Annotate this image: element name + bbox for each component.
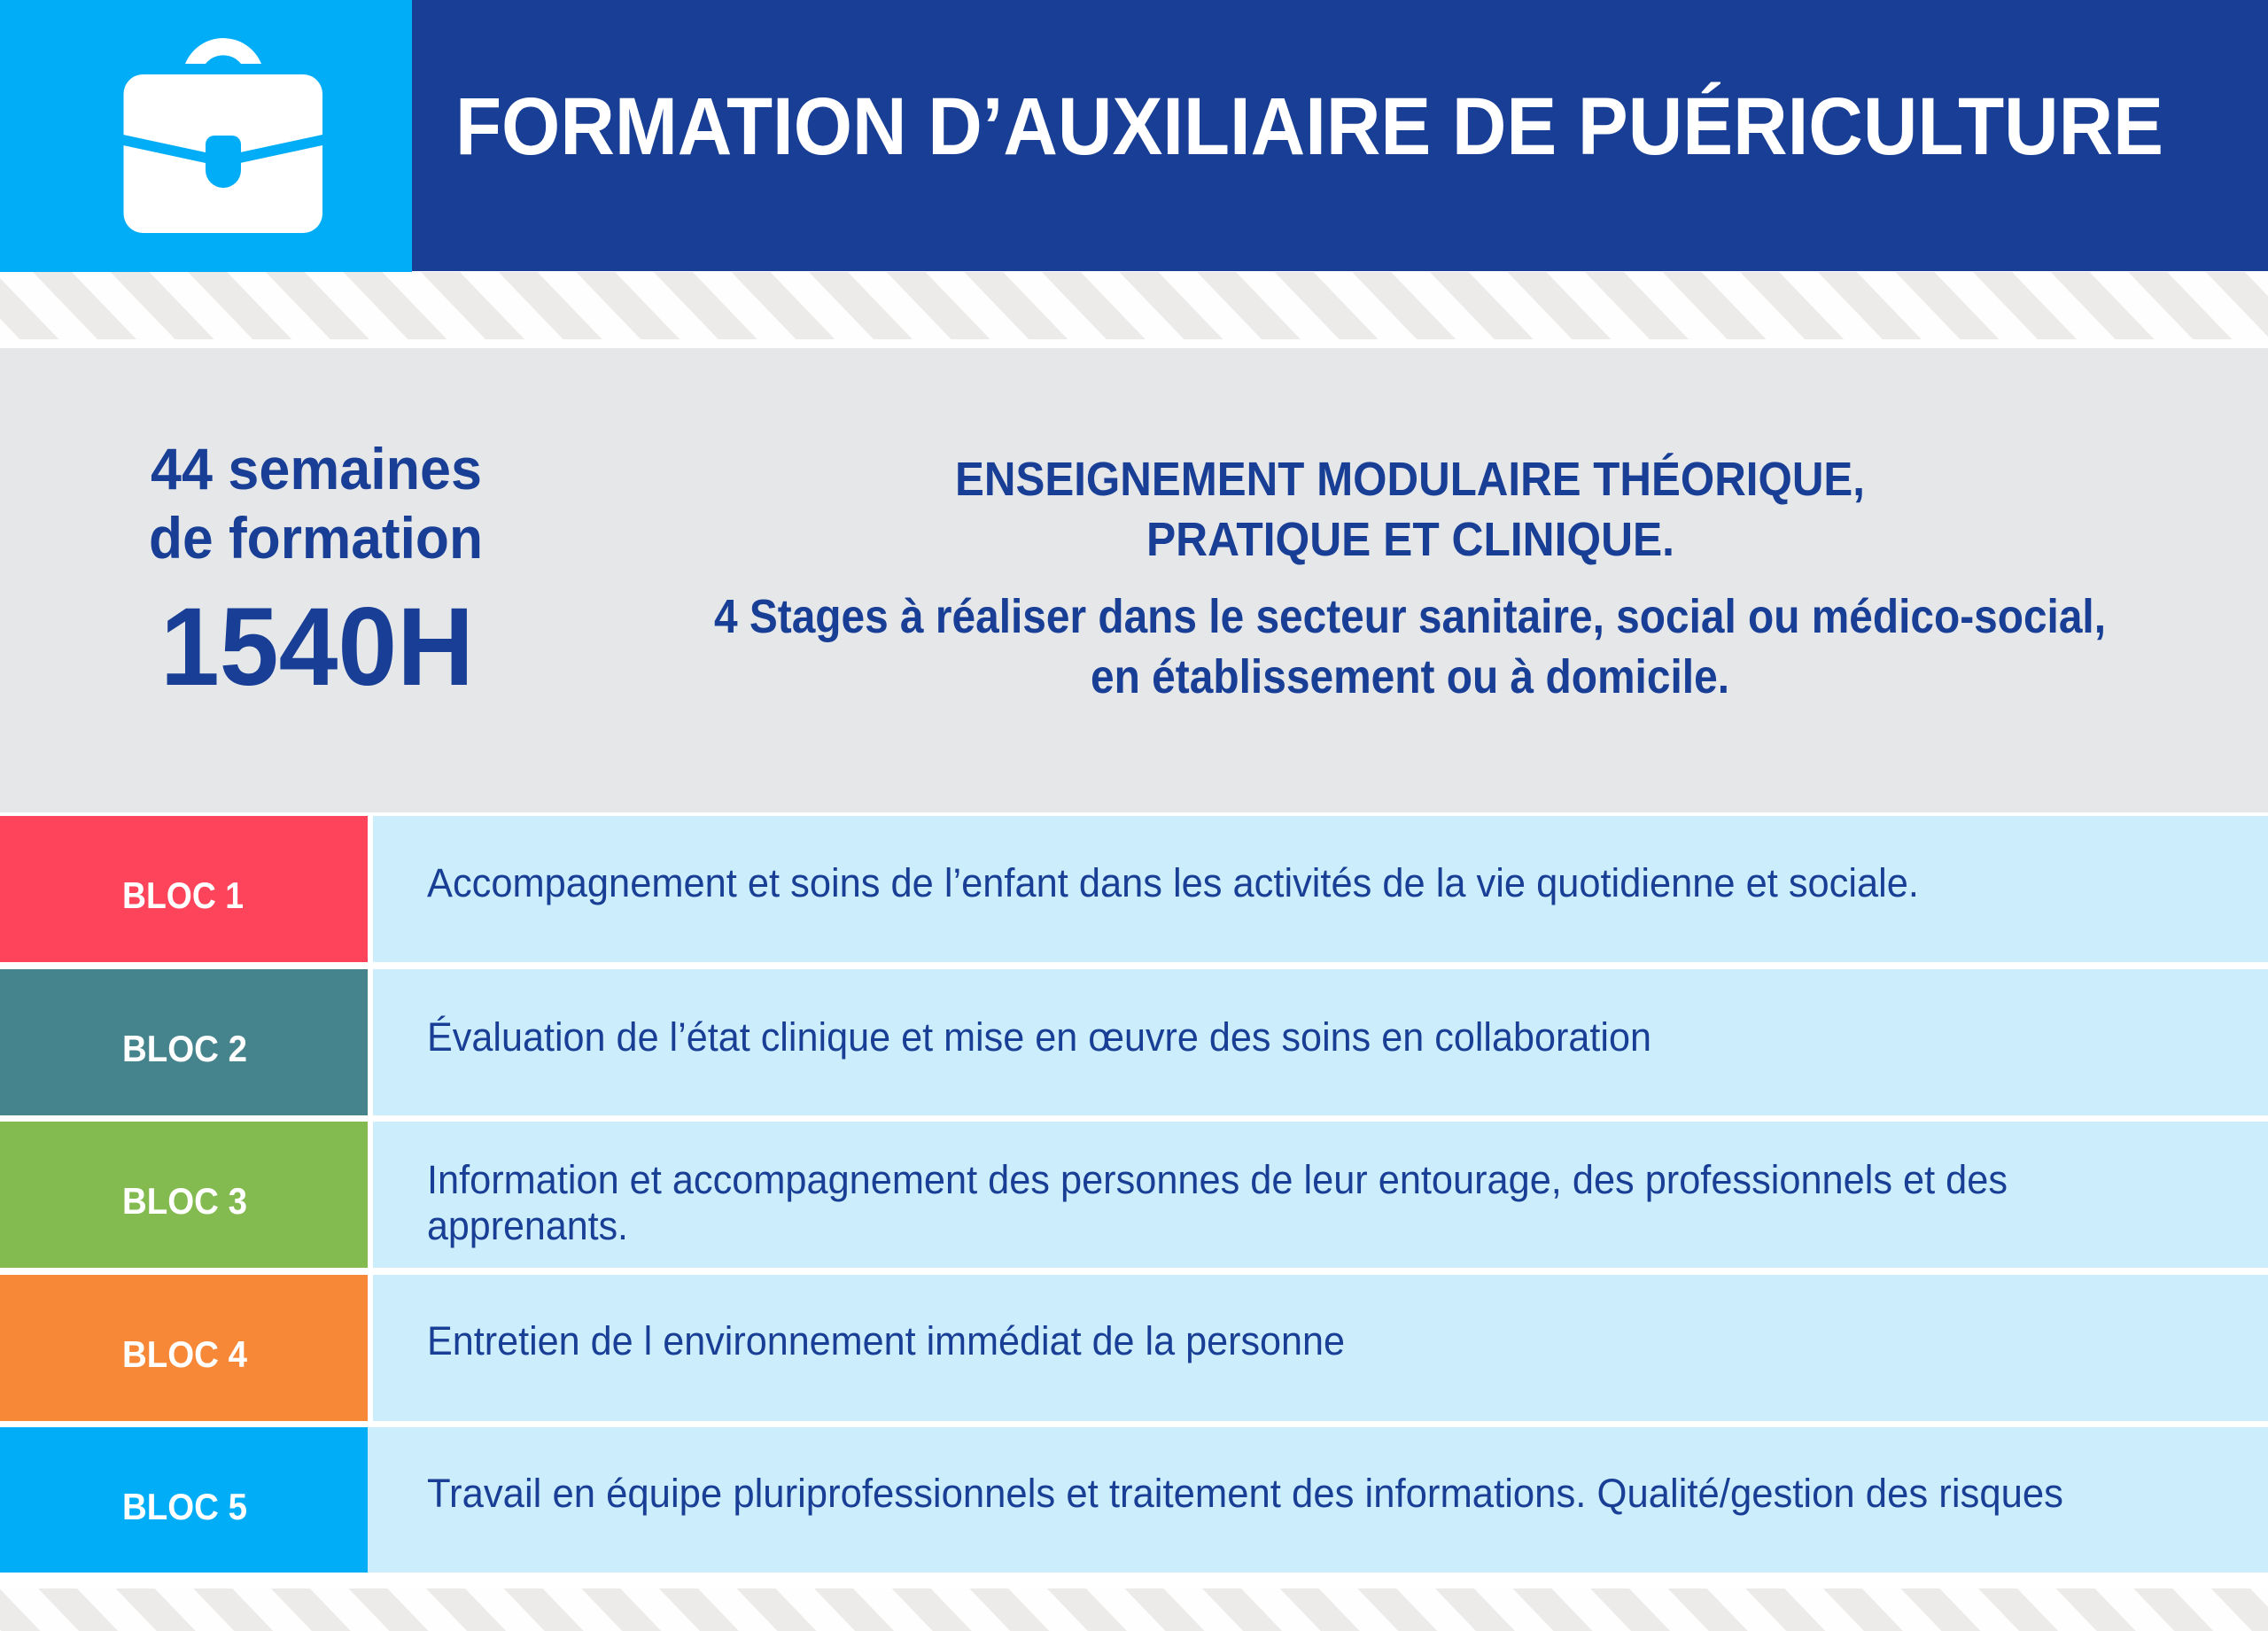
row: bloc 2: BLOC 2 — [122, 1028, 247, 1069]
teaching heading: PRATIQUE ET CLINIQUE. — [1146, 513, 1674, 566]
row: bloc 1: Accompagnement et soins de l’enfant dans les activités de la vie quotidienne et sociale. — [427, 860, 1919, 905]
row: bloc 3 — [0, 1122, 2268, 1268]
row: bloc 3: BLOC 3 — [122, 1180, 247, 1222]
row: bloc 4: BLOC 4 — [122, 1333, 248, 1375]
row: bloc 1 — [0, 816, 2268, 962]
icon panel — [0, 0, 412, 272]
duration text: 44 semaines — [151, 436, 482, 501]
header banner — [0, 0, 2268, 272]
title: FORMATION D’AUXILIAIRE DE PUÉRICULTURE — [455, 81, 2163, 172]
row: bloc 1: BLOC 1 — [122, 874, 244, 916]
row: bloc 2 — [0, 969, 2268, 1115]
row: bloc 5 — [0, 1427, 2268, 1573]
panel: summary — [0, 348, 2268, 812]
row: bloc 5: BLOC 5 — [122, 1486, 247, 1527]
internships text: en établissement ou à domicile. — [1091, 650, 1729, 703]
row: bloc 3: Information et accompagnement des personnes de leur entourage, des professionnels et des — [427, 1157, 2008, 1202]
row: bloc 3: apprenants. — [427, 1203, 628, 1248]
duration text: de formation — [149, 505, 483, 571]
striped band bottom — [0, 1588, 2268, 1631]
duration text — [149, 436, 483, 571]
row: bloc 2: Évaluation de l’état clinique et mise en œuvre des soins en collaboration — [427, 1014, 1651, 1060]
internships text: 4 Stages à réaliser dans le secteur sanitaire, social ou médico-social, — [714, 590, 2106, 643]
total hours: 1540H — [160, 586, 474, 709]
icon: briefcase — [123, 38, 322, 233]
internships text — [714, 590, 2106, 703]
striped band top — [0, 272, 2268, 339]
teaching heading — [955, 453, 1865, 566]
row: bloc 4: Entretien de l environnement immédiat de la personne — [427, 1318, 1345, 1363]
teaching heading: ENSEIGNEMENT MODULAIRE THÉORIQUE, — [955, 453, 1865, 506]
row: bloc 5: Travail en équipe pluriprofessionnels et traitement des informations. Qualité/gestion des risques — [427, 1471, 2063, 1516]
title panel — [412, 0, 2268, 271]
row: bloc 4 — [0, 1275, 2268, 1421]
